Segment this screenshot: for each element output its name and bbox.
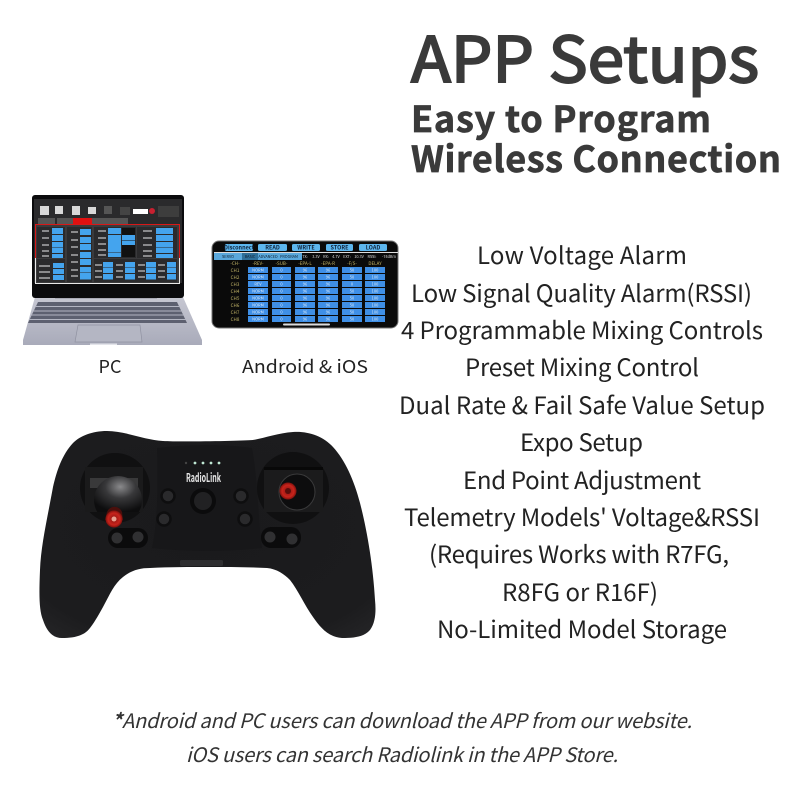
feature list: R8FG or R16F) [502, 573, 658, 608]
phone tabs: 4.7V [332, 255, 341, 260]
center panel [152, 445, 262, 551]
feature list: Low Voltage Alarm [477, 236, 687, 271]
feature list: Dual Rate & Fail Safe Value Setup [399, 386, 765, 421]
phone channel table: 100 [372, 282, 379, 288]
phone channel table: DELAY [368, 261, 382, 267]
phone channel table: 0 [351, 282, 354, 288]
transmitter controller photo [39, 431, 375, 638]
feature list: End Point Adjustment [463, 461, 701, 496]
right stick red knob [280, 482, 296, 500]
phone channel table: 96 [303, 274, 308, 280]
phone tabs [214, 252, 398, 260]
feature list: Low Signal Quality Alarm(RSSI) [411, 274, 752, 309]
phone channel table: NORM [252, 296, 264, 302]
phone top buttons: Disconnect [224, 244, 255, 252]
phone channel table: CH1 [231, 268, 240, 274]
red frame with setting grid [36, 224, 180, 284]
phone tabs: BASIC [245, 255, 256, 260]
phone channel table: NORM [252, 302, 264, 308]
phone channel table: 100 [372, 316, 379, 322]
phone channel table: 96 [326, 288, 331, 294]
phone channel table: -F/S- [347, 261, 357, 267]
feature list: Telemetry Models' Voltage&RSSI [404, 498, 760, 533]
phone channel table: CH7 [231, 310, 240, 316]
phone tabs: EXT: [343, 255, 351, 260]
phone channel table: NORM [252, 268, 264, 274]
phone channel table: 0 [280, 268, 283, 274]
phone tabs: 10.3V [354, 255, 365, 260]
subtitle: Easy to Program [411, 91, 711, 143]
phone channel table: 96 [303, 282, 308, 288]
phone channel table: NORM [252, 288, 264, 294]
phone channel table: 50 [350, 274, 355, 280]
phone tabs: TX: [302, 255, 308, 260]
phone channel table: CH5 [231, 296, 240, 302]
phone channel table: -SUB- [276, 261, 288, 267]
phone channel table: -EPA-L [298, 261, 312, 267]
laptop: PC app [23, 195, 202, 345]
phone channel table: 50 [350, 316, 355, 322]
phone channel table: 100 [372, 268, 379, 274]
phone channel table: CH8 [231, 317, 240, 323]
phone channel table: 96 [326, 282, 331, 288]
feature list: (Requires Works with R7FG, [429, 535, 729, 570]
tabs [38, 218, 55, 224]
phone channel table: CH3 [231, 282, 240, 288]
phone channel table: 100 [372, 296, 379, 302]
phone: Android and iOS app [212, 241, 398, 328]
phone channel table: CH2 [231, 275, 240, 281]
phone channel table: NORM [252, 274, 264, 280]
phone channel table: -REV- [252, 261, 264, 267]
phone channel table: 96 [326, 296, 331, 302]
phone top buttons: READ [265, 244, 280, 252]
phone channel table: 0 [280, 316, 283, 322]
left gimbal [80, 453, 150, 528]
phone channel table: 96 [326, 302, 331, 308]
subtitle [411, 91, 781, 183]
phone top buttons: WRITE [297, 244, 315, 252]
phone channel table: NORM [252, 316, 264, 322]
phone tabs: -74dBm [382, 254, 396, 260]
phone channel table: 50 [350, 268, 355, 274]
phone channel table: 50 [350, 310, 355, 316]
phone channel table: NORM [252, 310, 264, 316]
phone channel table: 0 [280, 282, 283, 288]
keyboard [28, 302, 187, 323]
phone tabs: ADVANCED [258, 255, 278, 260]
feature list: 4 Programmable Mixing Controls [401, 311, 763, 346]
phone channel table: 96 [303, 316, 308, 322]
phone channel table [230, 261, 385, 323]
phone tabs: RSSI: [368, 255, 376, 260]
controller body [39, 431, 375, 638]
phone channel table: 0 [280, 288, 283, 294]
feature list: No-Limited Model Storage [437, 610, 727, 645]
phone channel table: CH6 [231, 303, 240, 309]
left stick red knob [105, 507, 123, 520]
phone channel table: 96 [303, 296, 308, 302]
footnote: *Android and PC users can download the APP from our website. [112, 705, 692, 734]
label: Android and iOS: Android & iOS [242, 353, 368, 379]
phone channel table: 96 [303, 268, 308, 274]
LED indicators [185, 462, 220, 464]
phone tabs: PROGRAM [280, 255, 298, 260]
subtitle: Wireless Connection [411, 131, 781, 183]
phone channel table: REV [254, 282, 262, 288]
phone channel table: -EPA-R [321, 261, 335, 267]
feature list: Preset Mixing Control [465, 348, 699, 383]
phone channel table: 96 [326, 316, 331, 322]
laptop keyboard deck [23, 297, 202, 345]
phone channel table: 100 [372, 302, 379, 308]
phone channel table: 0 [280, 302, 283, 308]
footnote: iOS users can search Radiolink in the APP Store. [186, 739, 618, 768]
footnote [112, 705, 692, 768]
phone channel table: 100 [372, 310, 379, 316]
phone tabs: 3.3V [312, 255, 321, 260]
toolbar icons [40, 206, 179, 217]
phone channel table: 96 [326, 268, 331, 274]
phone channel table: -CH- [230, 261, 240, 267]
brand logo: RadioLink [186, 469, 221, 486]
center power button [190, 488, 216, 514]
phone channel table: 0 [280, 310, 283, 316]
phone channel table: CH4 [231, 289, 240, 295]
phone channel table: 96 [326, 274, 331, 280]
small buttons [158, 490, 252, 526]
phone tabs: RX: [323, 255, 329, 260]
phone channel table: 96 [303, 288, 308, 294]
trim buttons left [108, 528, 148, 548]
phone top buttons: LOAD [366, 244, 380, 252]
phone channel table: 50 [350, 302, 355, 308]
label: PC: PC [99, 353, 121, 379]
phone channel table: 96 [303, 302, 308, 308]
title: APP Setups [411, 10, 759, 101]
bottom port [180, 560, 223, 566]
right gimbal [257, 452, 329, 524]
phone channel table: 50 [350, 296, 355, 302]
phone channel table: 50 [350, 288, 355, 294]
phone channel table: 100 [372, 274, 379, 280]
phone channel table: 0 [280, 296, 283, 302]
phone channel table: 96 [303, 310, 308, 316]
trim buttons right [261, 527, 301, 548]
phone tabs: SERVO [222, 255, 234, 260]
phone channel table: 100 [372, 288, 379, 294]
phone top buttons [224, 244, 387, 252]
feature list [399, 236, 765, 645]
phone channel table: 96 [326, 310, 331, 316]
phone channel table: 0 [280, 274, 283, 280]
phone top buttons: STORE [331, 244, 349, 252]
feature list: Expo Setup [520, 423, 643, 458]
